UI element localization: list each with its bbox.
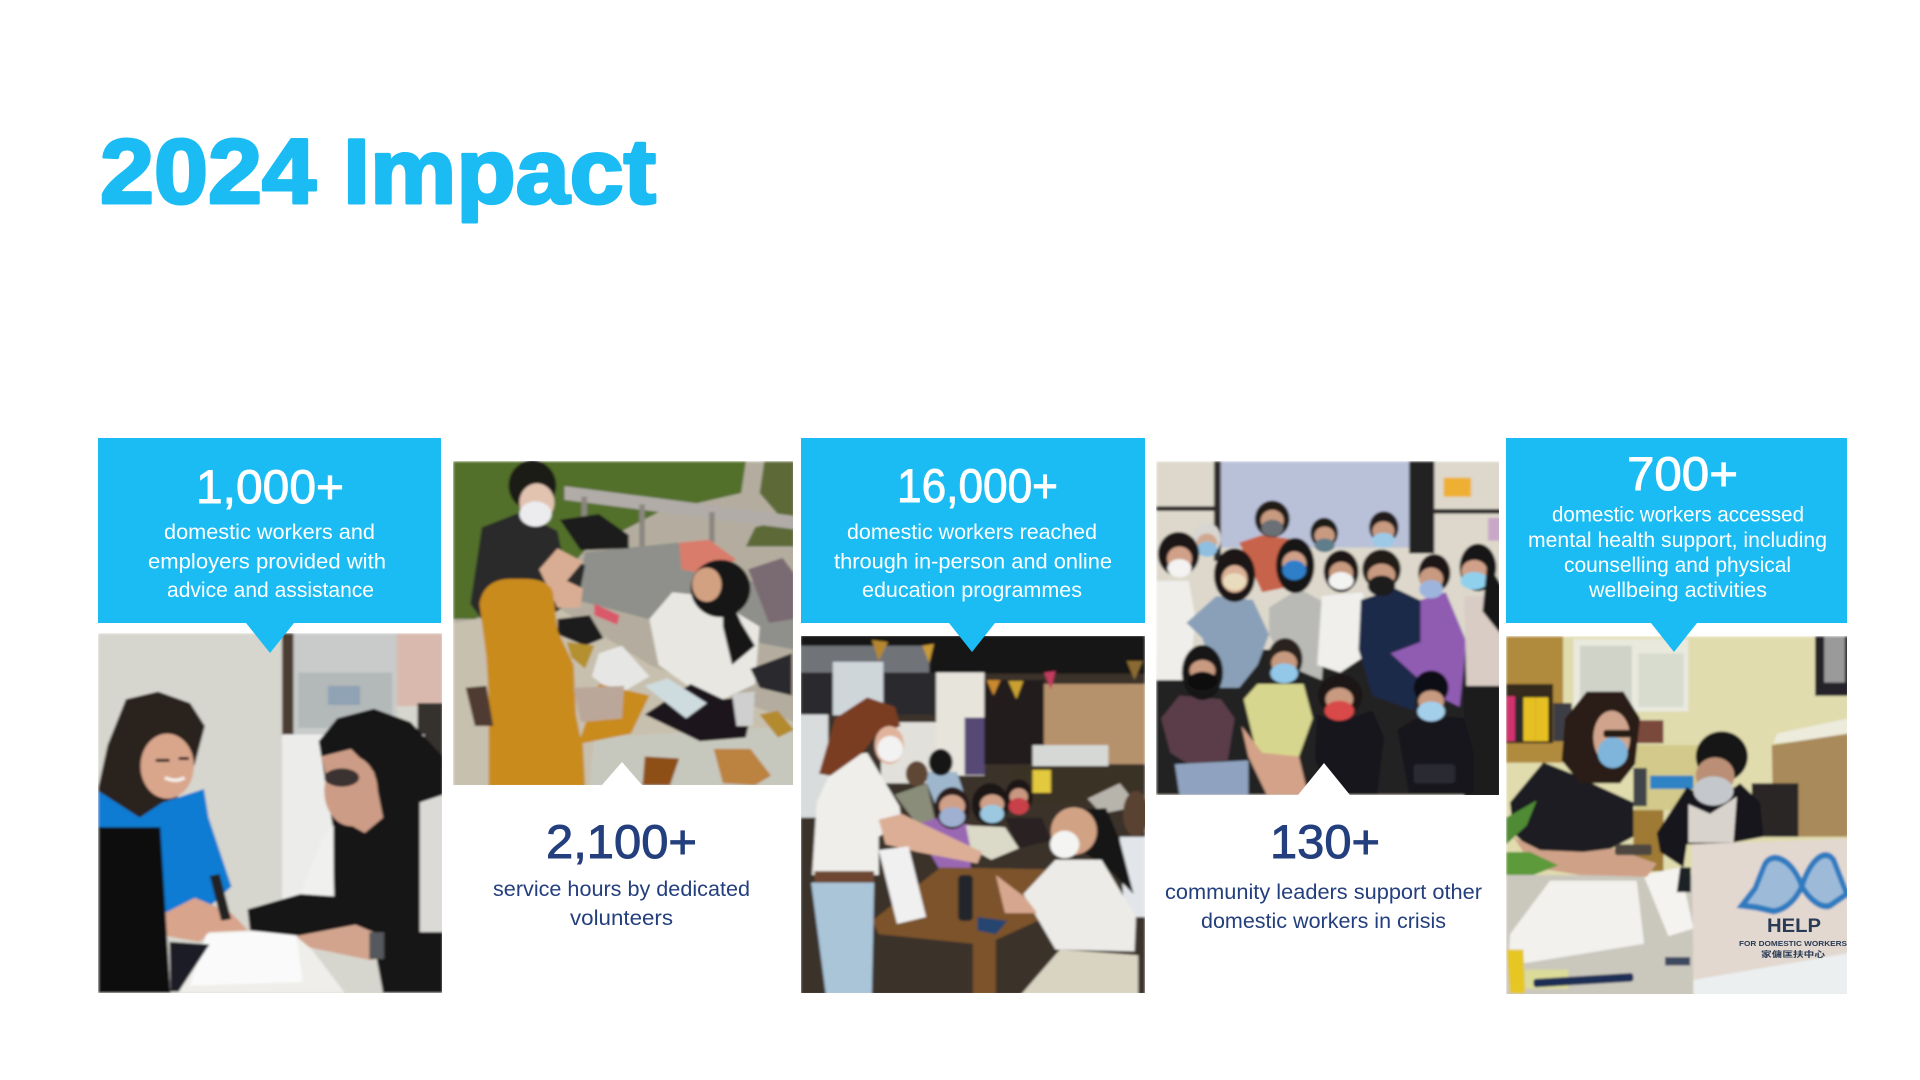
description: mental health support: wellbeing activities [1588, 578, 1767, 602]
description: service hours: service hours by dedicated [493, 877, 750, 901]
photo: education session in a cafe [801, 635, 1149, 995]
description: education programmes: education programmes [862, 578, 1082, 602]
photo: counselling at an office desk [1506, 637, 1849, 997]
description: advice and assistance [148, 520, 386, 602]
panel: 700+ callout [1506, 438, 1847, 652]
description: community leaders: domestic workers in crisis [1201, 909, 1446, 933]
stat: 130+: 130+ [1270, 815, 1380, 868]
description: mental health support [1528, 502, 1827, 602]
description: education programmes: through in-person and online [834, 550, 1112, 574]
icon: white notch on photo [1298, 763, 1350, 795]
sign text: HELP [1767, 916, 1821, 937]
sign logo [1742, 855, 1847, 911]
description: education programmes [834, 520, 1112, 602]
stat: 700+: 700+ [1627, 447, 1738, 500]
icon: callout pointer [246, 623, 294, 653]
stat: 2,100+: 2,100+ [546, 815, 697, 868]
description: community leaders: community leaders support other [1165, 880, 1482, 904]
photo: advisor and client at a desk [98, 634, 443, 995]
icon: white notch on photo [602, 762, 642, 785]
stat: 16,000+: 16,000+ [897, 459, 1058, 512]
description: service hours [493, 877, 750, 930]
description: mental health support: domestic workers accessed [1552, 502, 1804, 526]
icon: callout pointer [949, 623, 995, 652]
panel: 16,000+ callout [801, 438, 1145, 652]
panel: 1,000+ callout [98, 438, 441, 653]
description: mental health support: counselling and physical [1564, 553, 1791, 577]
description: advice and assistance: domestic workers and [164, 520, 375, 544]
icon: callout pointer [1651, 623, 1697, 652]
description: advice and assistance: employers provided with [148, 550, 386, 574]
photo: volunteers sitting on a picnic blanket [453, 461, 795, 786]
title: 2024 Impact [100, 121, 656, 223]
photo: group of community leaders [1157, 462, 1501, 797]
sign text: FOR DOMESTIC WORKERS [1739, 941, 1847, 948]
description: education programmes: domestic workers reached [847, 520, 1097, 544]
sign text [1739, 916, 1847, 959]
description: mental health support: mental health support, including [1528, 528, 1827, 552]
stat: 1,000+: 1,000+ [196, 460, 344, 513]
description: advice and assistance: advice and assistance [167, 578, 374, 602]
sign text: 家傭匡扶中心 [1761, 949, 1825, 959]
description: service hours: volunteers [570, 906, 673, 930]
description: community leaders [1165, 880, 1482, 933]
